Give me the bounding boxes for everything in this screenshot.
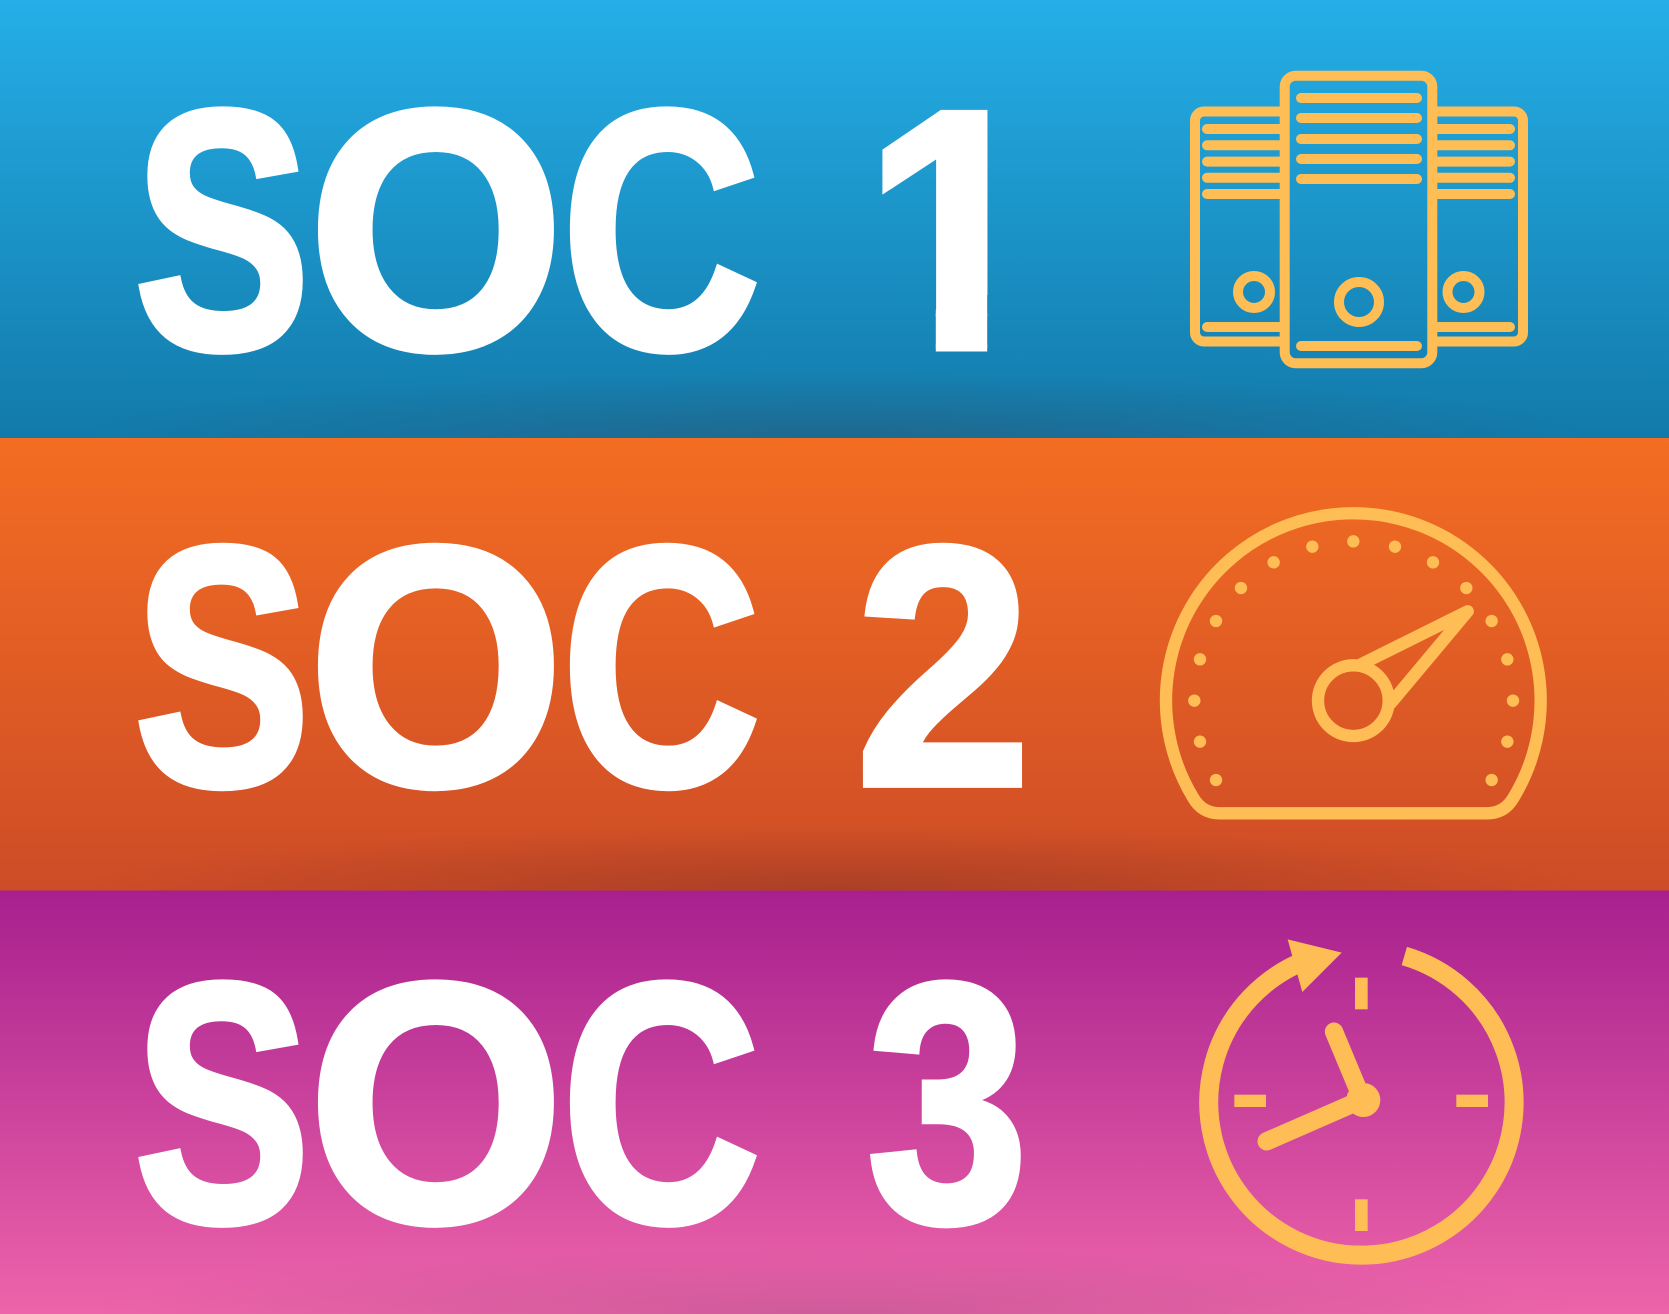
heading: SOC 3: C [561,913,761,1294]
gauge tick dots [1188,535,1519,786]
hour ticks [1234,978,1488,1231]
icon: clock with circular arrow [1209,939,1514,1255]
gauge outline [1166,513,1541,813]
icon: server towers [1195,76,1523,363]
right server [1435,112,1523,342]
heading: SOC 2: C [561,476,761,857]
heading: SOC 2: 2 [855,476,1032,857]
heading: SOC 3: 3 [867,913,1028,1294]
clock hub [1346,1083,1380,1117]
panel: SOC 2 [0,438,1669,890]
left server [1195,112,1282,342]
icon: speedometer gauge [1166,513,1541,813]
clock hands [1267,1032,1358,1141]
gauge hub [1318,665,1389,736]
heading: SOC 1: S [134,40,310,421]
heading: SOC 3: O [308,913,564,1294]
panel: SOC 3 [0,890,1669,1314]
gauge needle [1362,611,1468,703]
heading: SOC 2: O [308,476,564,857]
panel: SOC 1 [0,0,1669,438]
heading: SOC 2: S [134,476,310,857]
center server [1285,76,1432,363]
clock ring [1209,956,1514,1255]
heading: SOC 1: C [561,40,761,421]
heading: SOC 1: 1 [864,40,1044,421]
heading: SOC 3: S [134,913,310,1294]
arrow head [1288,939,1342,992]
heading: SOC 1: O [308,40,564,421]
